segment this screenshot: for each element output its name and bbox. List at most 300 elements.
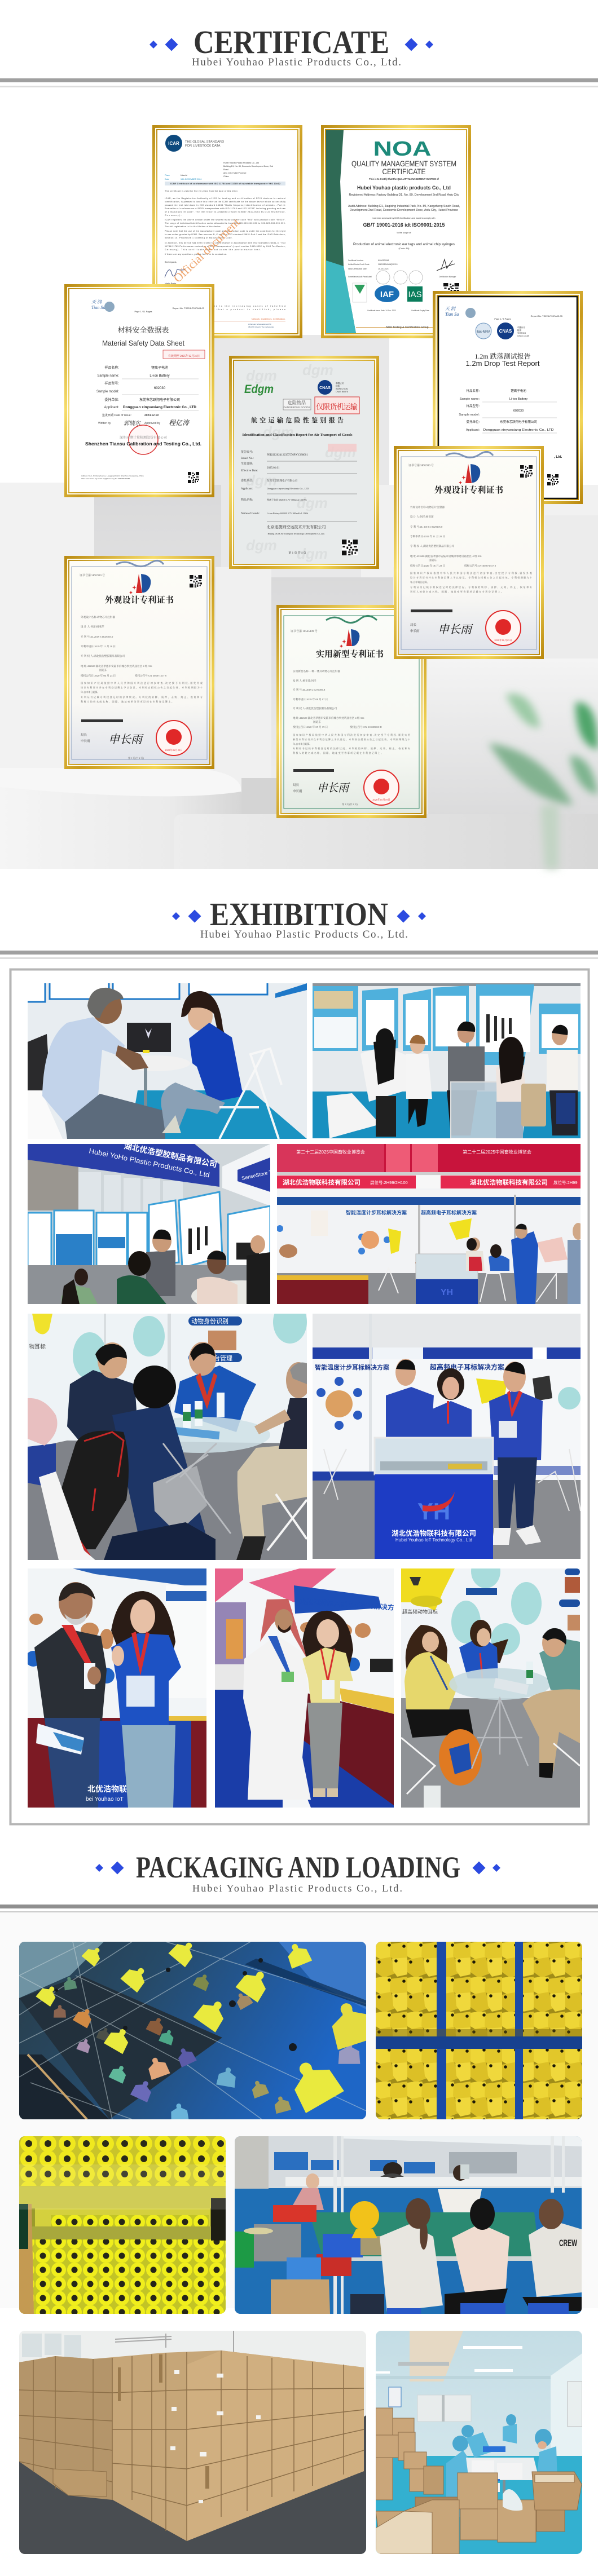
product table: [277, 1275, 368, 1304]
icon: Tiansu logo: [445, 306, 476, 318]
photo: Saudi visitor with staff: 低频温感植入式电子芯片解决方案: [300, 1597, 401, 1612]
certificate: utility model patent: 专 利 号:ZL 2019 2 1270496.8: [293, 688, 326, 692]
certificate: ICAR: Road: [223, 169, 228, 171]
icon: CNIPA logo: [340, 629, 359, 648]
certificate: utility model patent: 第 1 页 (共 2 页): [342, 802, 358, 806]
certificate: drop test report: Sample name:: [460, 397, 480, 401]
red fascia: 湖北优浩物联科技有限公司: [470, 1178, 548, 1186]
photo: booth with visitors: [313, 983, 581, 1138]
certificate: material safety data sheet: Sample name:: [97, 374, 119, 378]
certificate: air transport identification report: 北京迪捷姆空运技术开发有限公司: [266, 524, 326, 529]
certificate: ICAR: In addition, this device has been tested for performance in accordance with ISO standard 24631-3: "ISO: [165, 242, 285, 244]
photo: red fascia booth: 智能温度计步耳标解决方案: [346, 1209, 407, 1216]
icon: Tiansu logo: 天 润: [91, 299, 103, 304]
certificate: design patent left: 地 址:432600 湖北省孝感市安陆市府城办事处巩庙社区 4 组 316: [81, 664, 152, 668]
certificate: NOA quality management: Hubei Youhao plastic products Co., Ltd: [357, 185, 451, 191]
certificate: design patent left: 专 利 号:ZL 2019 3 0629305.0: [81, 635, 113, 639]
photo: red fascia booth: [277, 1144, 581, 1304]
packing table: [466, 2446, 537, 2494]
certificate: ICAR: Date: [165, 178, 169, 180]
certificate: ICAR: Hubei Youhao Plastic Products Co., Ltd: [223, 162, 259, 164]
certificate: material safety data sheet: Dongguan xinyuexiang Electronic Co., LTD: [123, 406, 197, 409]
certificate: NOA quality management: Development 2nd Road, Economic Development Zone, Anlu City, Hubei Province: [350, 209, 458, 212]
display case banner: [375, 1474, 493, 1559]
CNAS mark: 中国认可: [336, 382, 344, 385]
certificate: material safety data sheet: 样品名称:: [104, 365, 119, 370]
photo: crates of yellow ear tags: [376, 1942, 582, 2119]
certificate: air transport identification report: dgm: [246, 472, 277, 489]
icon: Tiansu logo: Tian Su: [445, 312, 459, 317]
certificate: utility model patent: 局长: [293, 783, 300, 787]
certificate: ICAR: to use codes granted by ICAR. See annexes B, C and E of ISO standard 24631-Part 1 and the ICAR Guidelines,: [165, 233, 285, 236]
certificate: NOA quality management: [321, 125, 471, 338]
certificate: air transport identification report: 生效日期:: [241, 462, 253, 466]
gallery frame: [10, 970, 589, 1824]
section: certificate: [0, 24, 598, 869]
certificate: design patent left: 申长雨: [81, 739, 90, 743]
display case banner: YH: [417, 1498, 450, 1525]
certificate: drop test report: 东莞市芯跃翔电子有限公司: [500, 419, 537, 424]
photo: ear tags in glass case: [19, 1937, 377, 2122]
certificate: ICAR: If there are any questions, please feel free to contact us.: [165, 253, 227, 255]
accreditation logos: TESTING: [517, 332, 526, 334]
certificate: design patent left: 授权公告号:CN 305871317 S: [135, 674, 167, 678]
certificate: material safety data sheet: Li-ion Battery: [150, 374, 170, 378]
seal: [156, 721, 191, 755]
certificate: material safety data sheet: 深圳天溯计量检测股份有限公司: [120, 435, 167, 440]
certificate: design patent left: 专利申请日:2019 年 11 月 20 日: [81, 644, 116, 648]
heading: exhibition: [172, 896, 426, 940]
section: packaging and loading: [0, 1850, 598, 2554]
photo: workers assembling on line: [235, 2136, 582, 2314]
NOA logo: NOA: [373, 137, 431, 160]
certificate: utility model patent: 国家知识产权局依照中华人民共和国专利法进行初步审查,决定授予专利权,颁发实用: [293, 733, 410, 737]
certificate: ICAR: Section 10, Procedure 1 Granting of Manufacturer Code.: [165, 237, 232, 239]
dgm logo: Edgm: [244, 383, 274, 396]
seal: [486, 611, 521, 646]
photo: customer and staff thumbs up: [28, 1568, 206, 1808]
certificate: utility model patent: 专利申请日:2019 年 08 月 07 日: [293, 697, 328, 701]
icon: left diamonds: [172, 910, 201, 922]
CNAS mark: [318, 380, 348, 395]
green work table: [309, 2212, 539, 2256]
foreground cartons: [376, 2472, 582, 2554]
certificate: air transport identification report: dgm: [246, 367, 277, 384]
certificate: material safety data sheet: Material Safety Data Sheet: [102, 339, 184, 347]
photo: three staff at display case: 智能温度计步耳标解决方案: [315, 1363, 389, 1371]
certificate: NOA quality management: Surveillance Audit Pass Label: [348, 276, 372, 278]
certificate: utility model patent: 专 利 权 人:湖北优浩塑胶制品有限公司: [293, 706, 337, 710]
certificate: design patent right: 国家知识产权局依照中华人民共和国专利法进行初步审查,决定授予专利权,颁发外观: [410, 571, 532, 575]
certificate: ICAR: ICAR registers the above device under the shared manufacturer code "900" with product code "90020".: [165, 219, 285, 221]
certificate: material safety data sheet: 2024.12.19: [144, 414, 159, 417]
accreditation logos: ilac-MRA: [477, 330, 490, 334]
heading: certificate: [150, 24, 433, 68]
certificate: utility model patent: 申长雨: [317, 782, 350, 794]
certificate: utility model patent: 授权公告日:2020 年 05 月 19 日: [293, 725, 328, 729]
icon: Tiansu logo: [91, 299, 115, 312]
certificate: drop test report: Dongguan xinyuexiang Electronic Co., LTD: [483, 428, 554, 432]
icon: ICAR logo: [165, 135, 182, 152]
certificate: drop test report: 样品型号:: [466, 404, 480, 408]
certificate: ICAR: Please note that the use of the manufacturer code and the product code is under the conditions for the right: [165, 230, 285, 232]
icon: right diamonds: [405, 38, 433, 51]
certificate: ICAR: China: [223, 175, 228, 178]
red fascia: [277, 1176, 581, 1188]
accreditation logos: [476, 322, 529, 339]
photo: discussion at glass table: 台管理: [214, 1354, 232, 1362]
CNAS mark: CNAS IB0878: [336, 391, 348, 393]
certificate: utility model patent: 授权公告号:CN 210508010 U: [350, 725, 382, 729]
photo: packing room in cleanroom: [376, 2331, 582, 2554]
certificate: utility model patent: [276, 605, 426, 818]
certificate: air transport identification report: 东莞市芯跃翔电子有限公司: [267, 479, 297, 483]
dangerous goods box: [283, 399, 311, 410]
certificate: drop test report: 锂离子电池: [511, 388, 526, 393]
photo: customer and staff thumbs up: bei Youhao IoT: [86, 1796, 124, 1802]
certificate: NOA quality management: Audit Address: Building D1, Jiaqixing Industrial Park, No. 89, Kangzheng South Road,: [348, 205, 460, 208]
certificate: ICAR: Evaluation of conformance of RFID transponders with ISO 11784 and ISO 11785" including granting and use: [165, 207, 285, 210]
photo: workers assembling on line: CREW: [559, 2238, 578, 2248]
certificate: design patent left: 设计专利证书并在专利登记簿上予以登记。专利权自授权公告之日起生效。专利权期限为十: [81, 686, 203, 689]
icon: Tiansu logo: Tian Su: [91, 305, 105, 310]
certificate: NOA quality management: to the scope of: [397, 232, 411, 234]
certificate: utility model patent: 国道东: [313, 720, 321, 724]
seal: 2020年06月23日: [165, 748, 183, 752]
certificate: material safety data sheet: 签发日期 Date of issue:: [102, 413, 131, 417]
certificate: ICAR: Anlu City, Hubei Province: [223, 172, 246, 174]
certificate: air transport identification report: dgm: [263, 423, 294, 440]
certificate: air transport identification report: Name of Goods:: [241, 512, 260, 515]
certificate: air transport identification report: 物品名称:: [241, 498, 253, 502]
certificate: ICAR: 18th DECEMBER 2024: [181, 178, 201, 180]
certificate: NOA quality management: Certificate Number:: [348, 259, 364, 262]
certificate: design patent right: 地 址:432600 湖北省孝感市安陆市府城办事处巩庙社区 4 组 316: [410, 554, 482, 558]
CNAS mark: INSPECTION: [336, 388, 348, 390]
certificate: design patent right: 专利申请日:2019 年 11 月 20 日: [410, 534, 445, 538]
certificate: ICAR: Germany). This certificate does not cover the performance test.: [165, 249, 261, 251]
dangerous goods box: DANGEROUS GOODS: [283, 406, 310, 409]
certificate: air transport identification report: dgm: [297, 494, 328, 511]
certificate: NOA quality management: This is to Certify that the QUALITY MANAGEMENT SYSTEM of: [369, 178, 439, 180]
certificate: design patent left: 授权公告日:2020 年 06 月 23 日: [81, 674, 116, 678]
certificate: material safety data sheet: 样品型号:: [104, 381, 119, 386]
certificate: material safety data sheet: [64, 284, 214, 497]
certificate: drop test report: Li-ion Battery: [509, 397, 527, 401]
certificate: material safety data sheet: Address: No.1, Jincheng Avenue, Longgang District, Shenzhen, Guangdong, China: [81, 475, 144, 477]
certificate: NOA quality management: 91420982MA48QCF015: [378, 263, 398, 266]
certificate: design patent right: 授权公告号:CN 305871317 S: [464, 564, 496, 568]
seal: 2020年06月23日: [494, 638, 512, 642]
certificate: ICAR: We would like to alert users to the increasing cases of falsified: [165, 305, 285, 307]
photo: meeting at glass table: [401, 1568, 580, 1808]
certificate: ICAR: Arthur van Schendelstraat 650: [248, 323, 271, 325]
watermark: Official document: [171, 215, 243, 285]
icon: CNIPA logo: [459, 464, 480, 484]
certificate: ICAR: visit www.icar.org and/or scan the QR code found here.: [165, 312, 214, 314]
certificate: design patent right: 证书号第 5891930 号: [408, 463, 434, 467]
certificate: material safety data sheet: 602030: [154, 387, 166, 390]
photo: three staff at display case: [313, 1314, 581, 1559]
certificate: material safety data sheet: 锂离子电池: [151, 365, 168, 370]
certificate: design patent left: 专利证书记载专利权登记时的法律状况。专利权的转移、质押、无效、终止、恢复和专: [81, 695, 203, 699]
certificate: design patent left: [64, 556, 214, 769]
certificate: design patent right: 申长雨: [438, 624, 473, 636]
display case banner: Hubei Youhao IoT Technology Co., Ltd: [395, 1537, 472, 1543]
fascia banner: [28, 1141, 219, 1187]
section background: [0, 1912, 598, 2308]
certificate: ICAR: Place: [165, 174, 170, 176]
photo: meeting at glass table: 超高频动物耳标: [402, 1609, 438, 1615]
workers in blue gowns: [446, 2414, 557, 2517]
certificate: air transport identification report: Dongguan xinyuexiang Electronic Co., LTD: [267, 487, 309, 491]
carton stack: [19, 2350, 364, 2541]
certificate: utility model patent: 利权人的姓名或名称、国籍、地址变更等事项记载在专利登记簿上。: [293, 751, 383, 754]
certificate: NOA quality management: CERTIFICATE: [382, 167, 425, 176]
photo: Saudi visitor with staff: [215, 1568, 401, 1808]
photo: visitor at laptop: [28, 983, 307, 1139]
accreditation logos: CNAS L8138: [517, 335, 529, 337]
certificate: design patent left: 专 利 权 人:湖北优浩塑胶制品有限公司: [81, 654, 125, 658]
stamp: [163, 350, 205, 359]
heading: packaging and loading: [95, 1850, 500, 1894]
certificate: air transport identification report: Identification and Classification Report for Air Transport of Goods: [243, 433, 353, 437]
certificate: drop test report: [433, 291, 583, 504]
plant: [489, 693, 598, 869]
icon: Tiansu logo: 天 润: [445, 306, 456, 311]
photo: stacked cartons in warehouse: [19, 2331, 366, 2554]
icon: ICAR logo: ICAR: [168, 141, 179, 146]
title: PACKAGING AND LOADING: [136, 1850, 460, 1884]
certificate: utility model patent: 发 明 人:杨亚萍;何洋: [293, 679, 316, 683]
fascia banner: Hubei YoHo Plastic Products Co., Ltd: [88, 1147, 210, 1179]
certificate: design patent left: 利权人的姓名或名称、国籍、地址变更等事项记载在专利登记簿上。: [81, 700, 174, 703]
certificate: NOA quality management: (Code: 19): [399, 247, 410, 250]
certificate: material safety data sheet: Written by: [98, 422, 111, 425]
subtitle: Hubei Youhao Plastic Products Co., Ltd.: [192, 1883, 402, 1894]
accreditation logos: 中国认可: [517, 326, 525, 329]
certificate: utility model patent: 实用新型名称:一种一体式动物芯片注射器: [293, 669, 340, 673]
certificate: ICAR: Utrecht: [181, 174, 187, 176]
certificate: air transport identification report: 报告编号:: [241, 450, 253, 454]
certificate: drop test report: 602030: [513, 409, 524, 413]
stamp: 有效期至 2025年12月31日: [168, 354, 200, 358]
certificate: design patent right: [394, 446, 544, 659]
certificate: design patent left: 外观设计专利证书: [105, 595, 174, 605]
photo: discussion at glass table: 动物身份识别: [191, 1317, 228, 1325]
certificate: NOA quality management: has been assessed by NOA Certification and found to comply with: [372, 217, 436, 219]
certificate: ICAR: Best regards,: [165, 261, 177, 263]
certificate: air transport identification report: 航空运输危险性鉴别报告: [251, 416, 344, 424]
certificate: design patent right: 专 利 号:ZL 2019 3 0629305.0: [410, 525, 443, 529]
certificate: air transport identification report: 委托单位:: [241, 479, 253, 483]
certificate: ICAR: This certificate is valid for five (5) years from the date of this letter.: [165, 190, 238, 192]
icon: left diamonds: [95, 1862, 124, 1874]
certificate: air transport identification report: PEKSZ2024122357576PXY280001: [267, 454, 308, 457]
certificate: drop test report: , Ltd.: [554, 456, 562, 459]
certificate: ICAR: Germany).: [165, 214, 182, 216]
certificate: design patent left: 证书号第 5891930 号: [80, 573, 105, 577]
certificate: air transport identification report: Applicant:: [241, 488, 253, 491]
certificate: design patent left: 年,自申请日起算。: [81, 690, 100, 694]
certificate: NOA quality management: Initial Certification Date:: [348, 268, 367, 270]
photo: tray of yellow tag buttons: [19, 2136, 226, 2314]
certificate: ICAR: 11784/11785 Performance evaluation of RFID transponders" (report number 2410-0052 by OLG TestService,: [165, 245, 285, 248]
certificate: utility model patent: 年,自申请日起算。: [293, 742, 312, 746]
accreditation logos: [353, 283, 459, 302]
certificate: NOA quality management: NOA2300948: [378, 259, 389, 262]
stacked cartons left: [376, 2408, 432, 2500]
certificate: air transport identification report: Issued No.:: [241, 457, 254, 460]
certificate: ICAR: of a manufacturer code". The test report is attached (report number 2410-0052 by OLG TestService,: [165, 211, 285, 213]
certificate: ICAR: FOR LIVESTOCK DATA: [185, 144, 221, 148]
certificate: design patent left: 局长: [81, 732, 87, 737]
display case: YH: [441, 1288, 453, 1297]
certificate: drop test report: Sample model:: [459, 413, 480, 417]
subtitle: Hubei Youhao Plastic Products Co., Ltd.: [200, 929, 408, 940]
certificate: NOA quality management: NOA Testing & Certification Group: [386, 326, 429, 329]
certificate: utility model patent: 申长雨: [293, 789, 302, 793]
certificate: ICAR: marks. In order to verify that a product is certified, please: [165, 308, 285, 311]
certificate: design patent left: 国道东: [99, 668, 107, 672]
certificate: air transport identification report: 第 1 页 共 4 页: [288, 551, 306, 555]
seal: [364, 770, 399, 805]
certificate: design patent left: 外观设计名称:动物芯片注射器: [81, 615, 115, 619]
certificate: design patent right: 年,自申请日起算。: [410, 580, 429, 584]
certificate: utility model patent: 新型专利证书并在专利登记簿上予以登记。专利权自授权公告之日起生效。专利权期限为十: [293, 737, 410, 741]
certificate: design patent left: 申长雨: [108, 734, 144, 746]
certificate: air transport identification report: 锂离子电池 602030 3.7V 300mAh 1.11Wh: [267, 498, 306, 501]
certificate: drop test report: 1.2m 跌落测试报告: [474, 352, 531, 360]
certificate: NOA quality management: QUALITY MANAGEMENT SYSTEM: [351, 160, 456, 168]
certificate: material safety data sheet: Sample model:: [96, 390, 119, 394]
certificate: NOA quality management: Certificate Issue Date: 14 Jun. 2023: [367, 310, 396, 312]
certificate: material safety data sheet: 东莞市芯跃翔电子有限公司: [139, 397, 180, 402]
certificate: design patent right: 外观设计名称:动物芯片注射器: [410, 505, 445, 509]
certificate: ICAR: The range of individual identification codes allocated is from 900.020.000.000.000 to 900.020.000.999.999.: [165, 222, 285, 224]
certificate: utility model patent: 证书号第 10545409 号: [291, 629, 318, 633]
certificate: drop test report: 样品名称:: [466, 388, 480, 393]
icon: CNIPA logo: [129, 574, 151, 594]
certificate: utility model patent: 专利证书记载专利权登记时的法律状况。专利权的转移、质押、无效、终止、恢复和专: [293, 746, 410, 750]
display case: [416, 1254, 478, 1304]
certificate: material safety data sheet: 材料安全数据表: [117, 326, 169, 334]
icon: right diamonds: [473, 1862, 500, 1874]
certificate: design patent right: 授权公告日:2020 年 06 月 23 日: [410, 564, 445, 568]
certificate: material safety data sheet: Shenzhen Tiansu Calibration and Testing Co., Ltd.: [85, 441, 201, 447]
certificate: NOA quality management: Production of animal electronic ear tags and animal chip syringes: [353, 243, 455, 246]
CNAS mark: CNAS: [319, 386, 331, 390]
display case banner: 湖北优浩物联科技有限公司: [392, 1529, 476, 1537]
red fascia: 展位号:2H99/2H100: [370, 1179, 408, 1185]
photo: customer and staff thumbs up: 北优浩物联: [87, 1784, 127, 1793]
certificate: design patent right: 申长雨: [410, 629, 420, 633]
photo: red fascia booth: 第二十二届2025中国畜牧业博览会: [296, 1149, 365, 1155]
certificate: ICAR: Martin Burke: [165, 282, 176, 285]
certificate: air transport identification report: Li-ion Battery 602030 3.7V 300mAh 1.11Wh: [267, 512, 308, 515]
photo: three staff at display case: 超高频电子耳标解决方案: [430, 1363, 504, 1371]
certificate: NOA quality management: 14 Jun. 2023: [378, 268, 389, 270]
certificate: material safety data sheet: Approved by: [144, 422, 161, 425]
certificate: material safety data sheet: Report No. TSZ24LT037A03-03: [173, 307, 205, 310]
certificate: NOA quality management: GB/T 19001-2016 idt ISO9001:2015: [363, 222, 445, 228]
certificate: design patent left: 第 1 页 (共 2 页): [128, 756, 144, 759]
accreditation logos: 检测: [517, 329, 521, 332]
certificate: design patent right: 局长: [410, 622, 417, 627]
photo: red fascia booth: 第二十二届2025中国畜牧业博览会: [463, 1149, 531, 1155]
icon: left diamonds: [150, 38, 178, 51]
certificate: air transport identification report: dgm: [297, 545, 328, 562]
certificate: drop test report: 委托单位:: [466, 419, 480, 424]
certificate: design patent right: 国道东: [429, 558, 437, 562]
dangerous goods box: 危险物品: [288, 400, 306, 405]
certificate: NOA quality management: Certificate Expiry Date: [411, 310, 429, 312]
photo: discussion at glass table: [28, 1314, 307, 1560]
certificate: ICAR: ICAR, as the Registration Authority of ISO for testing and certification of RFID devices for animal: [165, 197, 285, 200]
title: CERTIFICATE: [194, 24, 389, 60]
certificate: NOA quality management: Registered Address: Factory Building D1, No. 89, Development 2nd Road, Anlu City: [349, 193, 459, 197]
certificate: utility model patent: 实用新型专利证书: [316, 649, 384, 659]
certificate: air transport identification report: 2025.01.01: [267, 467, 280, 470]
studio backdrop photo: [0, 335, 598, 869]
certificate: air transport identification report: dgm: [246, 537, 277, 554]
certificate: air transport identification report: [229, 356, 379, 569]
photo: Hubei YoHo booth fascia: SenseStore Tech: [241, 1168, 280, 1181]
seal: 2020年05月19日: [372, 798, 390, 802]
certificate: ICAR: 3511 MJ Utrecht, The Netherlands: [248, 326, 274, 328]
certificate: design patent right: 专利证书记载专利权登记时的法律状况。专利权的转移、质押、无效、终止、恢复和专: [410, 585, 532, 589]
photo: discussion at glass table: 物耳标: [29, 1343, 46, 1350]
certificate: air transport identification report: dgm: [302, 361, 333, 378]
certificate: design patent right: 设计专利证书并在专利登记簿上予以登记。专利权自授权公告之日起生效。专利权期限为十: [410, 576, 532, 579]
certificate: design patent left: 国家知识产权局依照中华人民共和国专利法进行初步审查,决定授予专利权,颁发外观: [81, 681, 203, 685]
certificate: ICAR: passed the test laid down in ISO standard 24631 "Radio frequency identification of animals - Part 3:: [165, 204, 285, 206]
certificate: drop test report: Applicant:: [466, 428, 480, 432]
certificate: design patent right: 外观设计专利证书: [434, 485, 504, 495]
foreground workers rear table: [285, 2162, 582, 2212]
section: exhibition: [0, 896, 598, 1824]
red fascia: 湖北优浩物联科技有限公司: [283, 1178, 360, 1186]
red fascia: 展位号:2H99: [553, 1179, 578, 1185]
certificate: air transport identification report: dgm: [325, 444, 356, 461]
accreditation logos: CNAS: [499, 329, 512, 334]
certificate: NOA quality management: Unified Social Credit Code:: [348, 263, 370, 266]
certificate: ICAR: ICAR Certificate of conformance with ISO 11784 and 11785 of injectable transponder YH2 13x12: [170, 183, 280, 185]
certificate: drop test report: Report No. TSZ24LT037A03-05: [531, 315, 563, 317]
certificate: drop test report: 1.2m Drop Test Report: [466, 359, 540, 368]
certificate: ICAR: Building D1, No. 89, Economic Development Zone, 2nd: [223, 165, 273, 167]
certificate: material safety data sheet: Applicant:: [104, 406, 119, 409]
certificate: material safety data sheet: 委托单位:: [104, 397, 119, 402]
accreditation logos: IAF: [380, 290, 394, 299]
accreditation logos: IAS: [408, 290, 422, 299]
certificate: NOA quality management: Certification Manager: [439, 276, 456, 278]
seal: [129, 425, 158, 454]
certificate: material safety data sheet: Page 1 / 11 Pages: [135, 311, 152, 313]
certificate: ICAR: identification, is pleased to issue this letter as the ICAR certificate for the above device which successfully: [165, 201, 285, 203]
certificate: ICAR: Network. Guidelines. Certification.: [252, 317, 285, 320]
certificate: air transport identification report: Beijing DGM Air Transport Technology Development Co.,Ltd.: [267, 532, 325, 536]
certificate: material safety data sheet: 郭晓东: [124, 420, 142, 427]
cargo only box: [315, 397, 359, 414]
certificate: utility model patent: 地 址:432600 湖北省孝感市安陆市府城办事处巩庙社区 4 组 316: [293, 716, 364, 720]
icon: right diamonds: [397, 910, 426, 922]
certificate: material safety data sheet: Web: www.tiansu.org Email: tsjc@tiansu.org Tel: 0755-89417984: [81, 478, 130, 480]
certificate: material safety data sheet: 程亿涛: [169, 419, 190, 427]
photo: red fascia booth: 超高频电子耳标解决方案: [421, 1209, 477, 1216]
certificate: ICAR: THE GLOBAL STANDARD: [185, 140, 224, 144]
certificate: ICAR: [152, 125, 302, 338]
